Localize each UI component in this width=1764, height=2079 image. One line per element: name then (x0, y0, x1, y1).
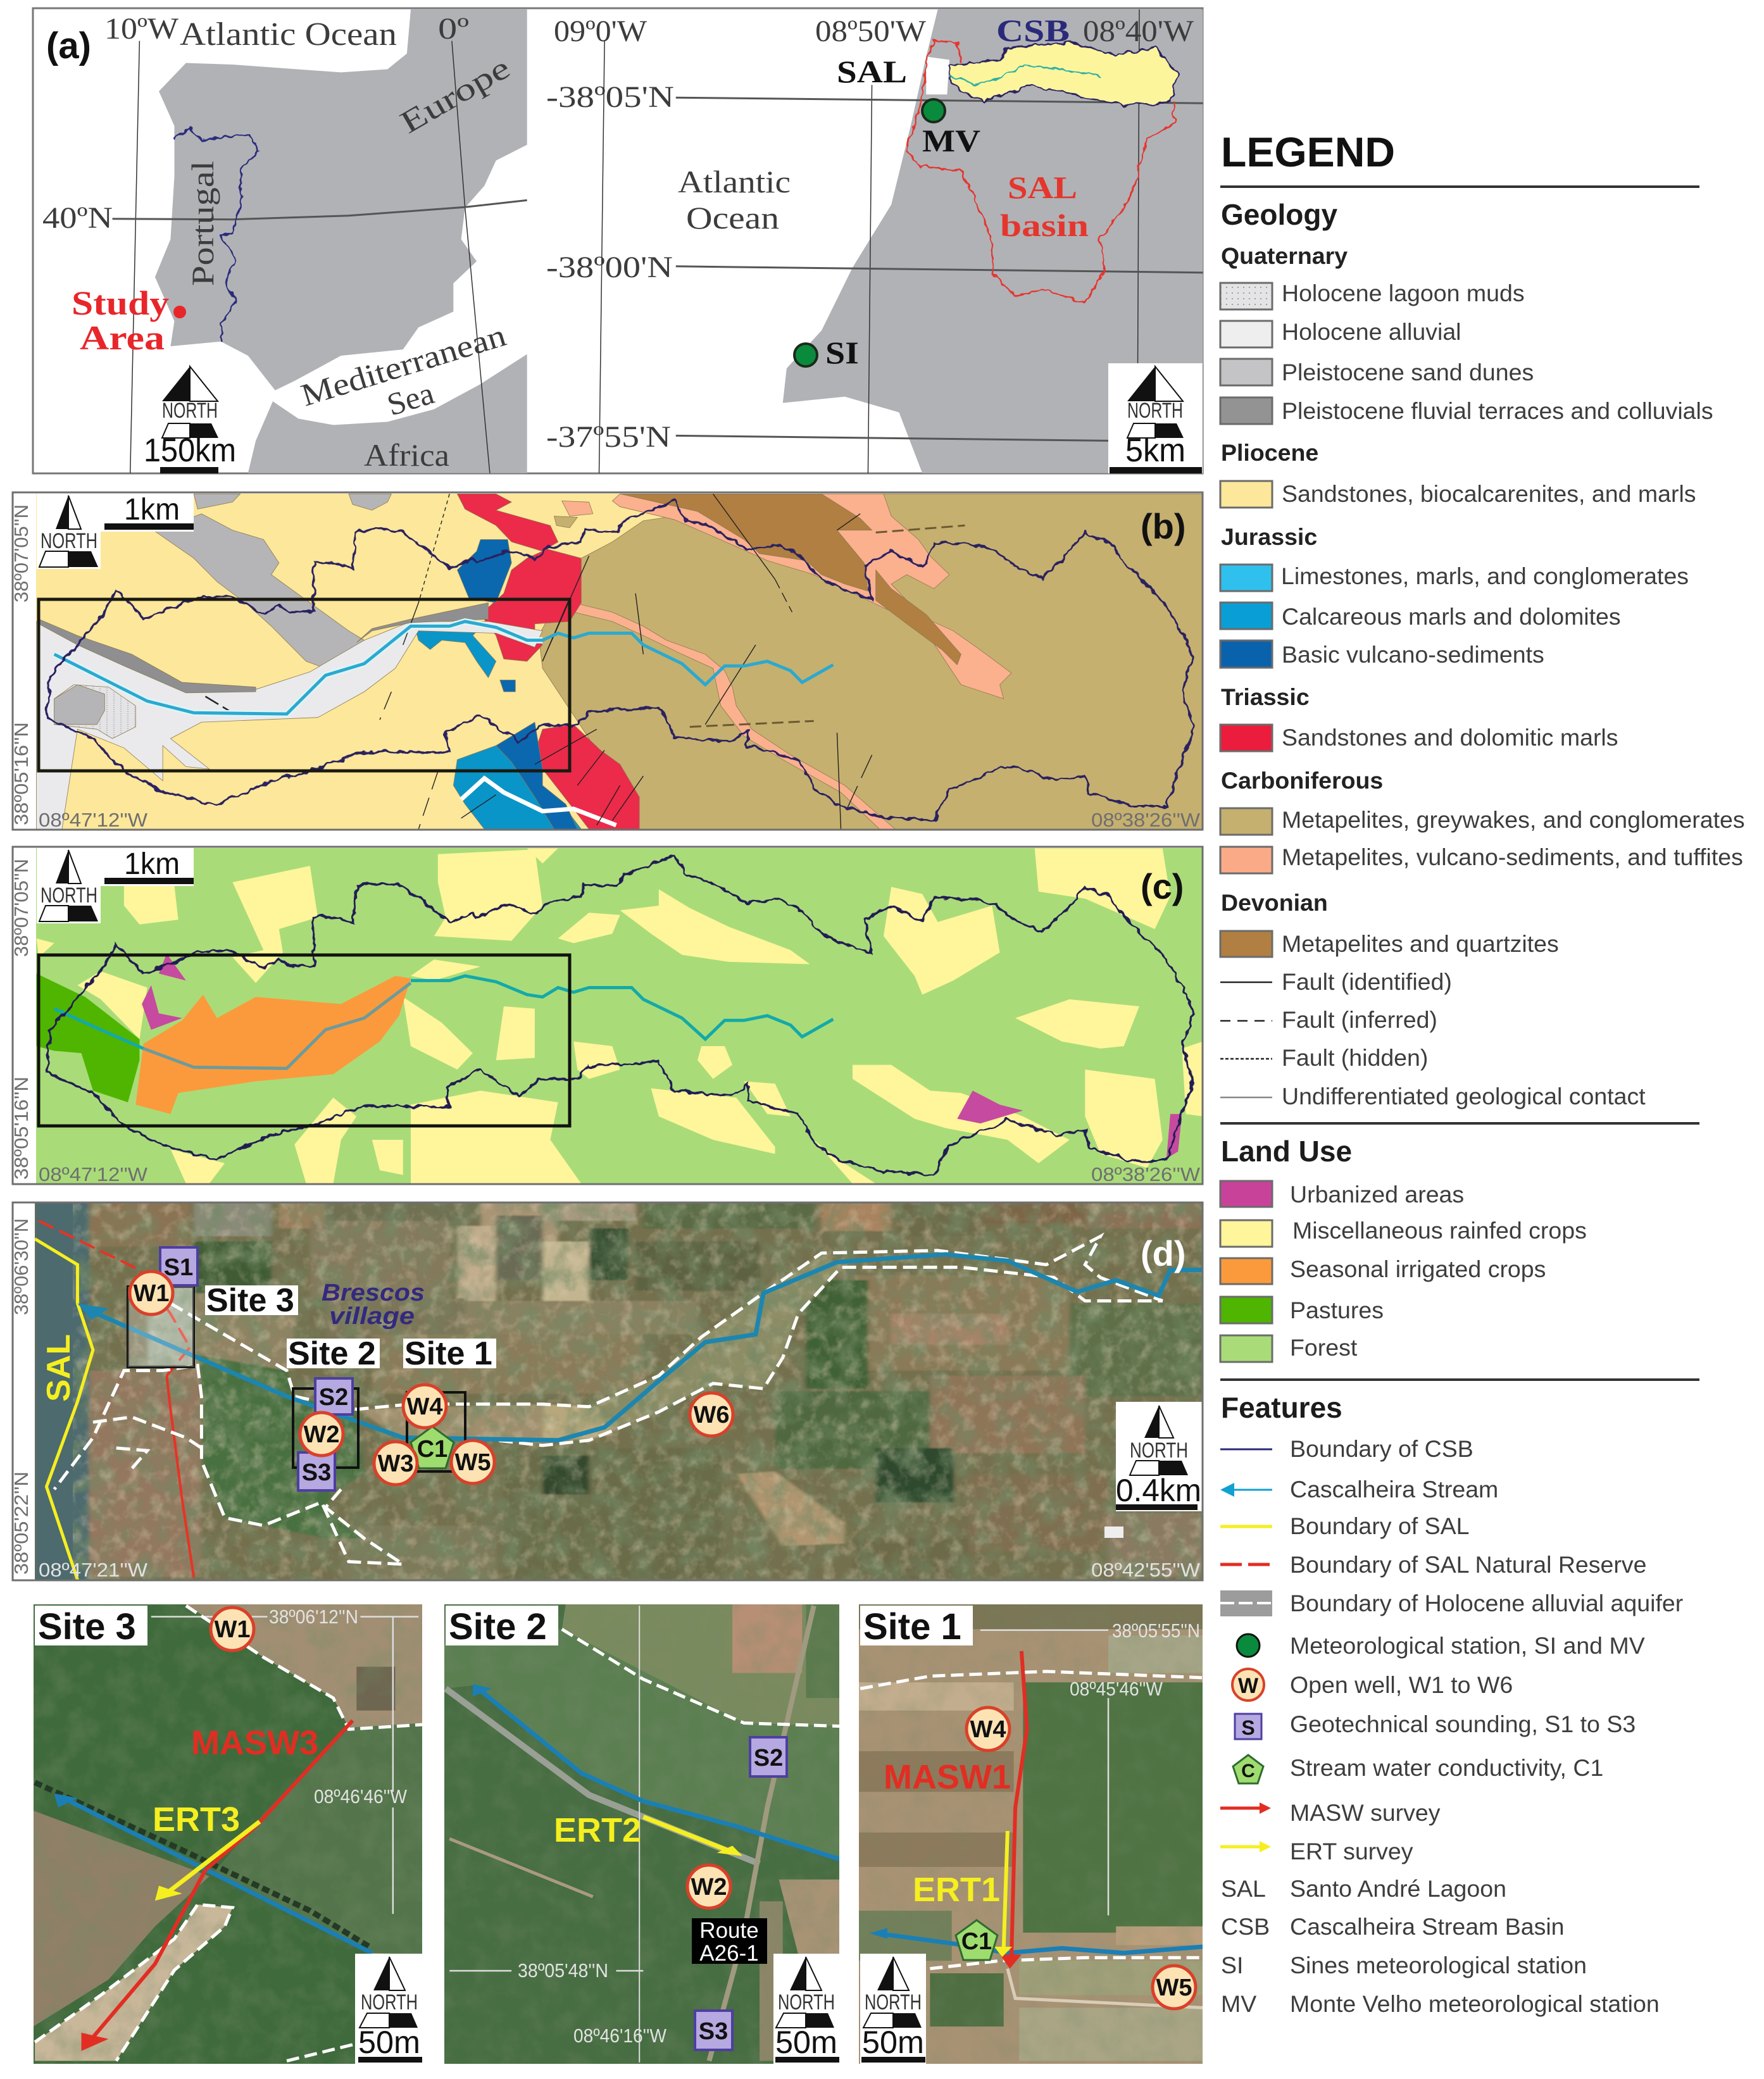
boundary of CSB (46, 855, 1194, 1175)
labels: map (a): Sea (383, 375, 438, 423)
panel: Site 2 (444, 1604, 839, 2064)
section: Geology: Undifferentiated geological contact (1282, 1083, 1646, 1109)
section: Geology (1220, 198, 1745, 1109)
section: Geology: Geology (1221, 198, 1337, 231)
north arrow and scale: map (c): NORTH (41, 883, 97, 908)
stream conductivity C1: C1 (417, 1436, 447, 1463)
icon: meteorological station SI (794, 344, 817, 366)
north arrow: map (a) right (1108, 363, 1203, 473)
section: Geology: Triassic (1221, 684, 1310, 710)
labels: Site 1: Site 1 (863, 1606, 961, 1647)
north arrow and scale: map (d): NORTH (1130, 1439, 1188, 1463)
labels: map (a): 08º40'W (1083, 15, 1194, 48)
label: SAL: SAL (41, 1334, 77, 1402)
labels: map (a): Portugal (185, 161, 220, 286)
labels: Site 1: C1 (961, 1928, 992, 1955)
section: Land Use: Pastures (1290, 1297, 1384, 1323)
north arrow and scale: Site 2: NORTH (778, 1990, 835, 2014)
labels: map (a): 40ºN (42, 201, 113, 235)
label: Brescos village: Brescos (322, 1280, 425, 1306)
labels: Site 1: W5 (1156, 1975, 1192, 2001)
north arrow and scale: map (b) (37, 493, 194, 569)
section: Geology: Sandstones and dolomitic marls (1282, 724, 1618, 751)
labels: map (a): Mediterranean (297, 317, 510, 413)
north arrow and scale: Site 1 (860, 1954, 926, 2064)
site labels: Site 3 (206, 1282, 294, 1319)
panel: (a) location maps (33, 8, 1203, 473)
north arrow and scale: map (c) (37, 847, 194, 923)
linework: alluvial aquifer boundary, lagoon, reserve, stream (35, 1221, 1203, 1580)
study window rectangle (39, 599, 570, 771)
labels: map (a): Europe (394, 49, 516, 140)
coordinates: map (d): 38º05'22''N (10, 1471, 32, 1575)
section: Features: Boundary of Holocene alluvial aquifer (1290, 1590, 1683, 1616)
site labels (205, 1282, 496, 1372)
section: Geology: Metapelites, vulcano-sediments, and tuffites (1282, 844, 1743, 870)
north arrow and scale: map (b): 1km (124, 493, 180, 527)
section: Features: Open well, W1 to W6 (1290, 1671, 1513, 1698)
imagery: Site 1 (859, 1604, 1203, 2064)
coordinates: map (d): 08º42'55''W (1091, 1559, 1201, 1581)
Portugal border, CSB and SAL basin outlines (175, 39, 1178, 342)
labels: Site 2 (446, 1606, 787, 2050)
labels: map (a): 0º (438, 12, 469, 46)
section: Land Use: Seasonal irrigated crops (1290, 1256, 1546, 1282)
land: Iberia and Africa (113, 9, 1203, 473)
section: Features: MASW survey (1290, 1799, 1441, 1826)
section: Land Use: Urbanized areas (1290, 1181, 1464, 1208)
section: Geology: Basic vulcano-sediments (1282, 641, 1544, 668)
section: Features: Features (1221, 1391, 1342, 1424)
coordinates: map (c): 38º07'05''N (10, 859, 32, 957)
section: Land Use: Land Use (1221, 1135, 1352, 1168)
label: Route A26-1: A26-1 (699, 1941, 759, 1966)
section: Geology: Fault (inferred) (1282, 1006, 1437, 1033)
north arrow and scale: Site 1: NORTH (865, 1990, 922, 2014)
land-use polygons (37, 848, 1203, 1183)
section: Geology: Metapelites and quartzites (1282, 930, 1559, 957)
section: Geology: Carboniferous (1221, 767, 1383, 794)
section: Geology: Holocene alluvial (1282, 318, 1461, 345)
labels: map (a): basin (1000, 208, 1089, 243)
wells W1 to W6: W1 (133, 1280, 170, 1307)
label: Route A26-1: Route (699, 1918, 759, 1943)
labels: map (a): (a) (46, 25, 91, 66)
stream conductivity C1 (411, 1427, 454, 1468)
linework: Site 3 (35, 1606, 422, 2061)
stream: Cascalheira (54, 976, 833, 1068)
linework: Site 2 (446, 1606, 839, 2063)
labels: Site 1 (860, 1606, 1200, 2009)
labels: Site 2: W2 (691, 1874, 727, 1901)
labels: Site 3: MASW3 (191, 1724, 318, 1762)
labels: map (a): MV (922, 123, 980, 158)
north arrow and scale: map (b): NORTH (41, 529, 97, 553)
labels: Site 2: Site 2 (449, 1606, 547, 1647)
labels: Site 1: W4 (970, 1716, 1006, 1743)
wells W1 to W6: W5 (454, 1449, 491, 1476)
north arrow: map (a) right: NORTH (1127, 399, 1183, 423)
labels: map (a): Africa (364, 437, 449, 473)
north arrow and scale: Site 2 (773, 1954, 839, 2064)
site labels: Site 1 (404, 1335, 492, 1372)
labels: map (a): -38º00'N (546, 251, 673, 284)
wells W1 to W6: W4 (406, 1394, 443, 1420)
labels: Site 1: 38º05'55''N (1112, 1620, 1200, 1642)
section: Features: SI (1221, 1952, 1243, 1978)
label: Brescos village: village (329, 1303, 415, 1330)
geology polygons (37, 494, 1203, 829)
labels: map (a): Atlantic Ocean (180, 16, 397, 53)
section: Features: Sines meteorological station (1290, 1952, 1587, 1978)
north arrow and scale: Site 3 (355, 1954, 422, 2064)
section: Geology: Holocene lagoon muds (1282, 280, 1525, 306)
labels: Site 2: S2 (754, 1745, 783, 1771)
section: Features: Meteorological station, SI and MV (1290, 1632, 1645, 1659)
satellite imagery background (35, 1202, 1203, 1582)
linework: Site 1 (860, 1630, 1203, 2007)
labels: map (a): 08º50'W (815, 15, 927, 48)
wells W1 to W6: W6 (694, 1402, 729, 1428)
labels: Site 1: 08º45'46''W (1070, 1678, 1163, 1700)
section: Geology: Pleistocene fluvial terraces and colluvials (1282, 397, 1713, 424)
north arrow: map (a) left (144, 366, 236, 473)
soundings S1 to S3 (160, 1247, 353, 1490)
section: Features: Santo André Lagoon (1290, 1875, 1506, 1902)
labels: map (a): Area (80, 319, 165, 357)
north arrow: map (a) right: 5km (1125, 432, 1185, 469)
coordinates: map (b): 08º38'26''W (1091, 809, 1201, 831)
labels: map (a): SAL (837, 54, 907, 89)
heading: LEGEND: LEGEND (1221, 128, 1395, 175)
section: Features: Boundary of SAL (1290, 1513, 1470, 1539)
soundings S1 to S3: S3 (302, 1459, 331, 1486)
section: Land Use: Miscellaneous rainfed crops (1292, 1217, 1587, 1244)
labels: map (a): Atlantic (678, 164, 791, 199)
labels: Site 3: ERT3 (153, 1801, 240, 1839)
imagery: Site 2 (444, 1604, 839, 2064)
north arrow: map (a) left: NORTH (162, 399, 218, 423)
labels: map (a): Ocean (686, 200, 779, 235)
labels: Site 3: 08º46'46''W (314, 1785, 408, 1807)
section: Features: CSB (1221, 1913, 1270, 1940)
section: Features: MV (1221, 1990, 1256, 2017)
section: Features: ERT survey (1290, 1838, 1413, 1864)
imagery: Site 3 (34, 1604, 422, 2064)
section: Geology: Quaternary (1221, 242, 1348, 269)
labels: map (a) (42, 12, 1194, 473)
labels: Site 2: ERT2 (554, 1811, 641, 1849)
panel: Site 3 (34, 1604, 422, 2064)
wells W1 to W6: W3 (377, 1451, 414, 1477)
section: Geology: Calcareous marls and dolomites (1282, 603, 1621, 630)
section: Geology: Metapelites, greywakes, and conglomerates (1282, 806, 1745, 833)
section: Features: Boundary of CSB (1290, 1435, 1473, 1462)
section: Geology: Pliocene (1221, 439, 1318, 466)
study window rectangle (39, 955, 570, 1126)
section: Geology: Sandstones, biocalcarenites, and marls (1282, 480, 1696, 507)
labels: map (a): SAL (1008, 170, 1077, 205)
labels: map (a): Study (72, 284, 169, 322)
labels: Site 3: 38º06'12''N (269, 1606, 358, 1628)
labels: Site 2: 38º05'48''N (518, 1959, 608, 1982)
coordinates: map (b) (10, 504, 1201, 831)
boundary of CSB (46, 501, 1194, 820)
wells W1 to W6: W2 (304, 1421, 339, 1448)
north arrow and scale: Site 2: 50m (775, 2025, 837, 2060)
section: Geology: Limestones, marls, and conglomerates (1281, 563, 1689, 589)
north arrow and scale: map (d) (1116, 1402, 1203, 1511)
section: Features: Stream water conductivity, C1 (1290, 1754, 1603, 1781)
coordinates: map (b): 38º07'05''N (10, 504, 32, 602)
coordinates: map (b): 38º05'16''N (10, 722, 32, 825)
coordinates: map (c): 08º47'12''W (39, 1163, 148, 1185)
label: Route A26-1 (692, 1918, 767, 1966)
heading: (d): (d) (1141, 1233, 1186, 1273)
north arrow and scale: Site 3: NORTH (361, 1990, 418, 2014)
labels: map (a): CSB (996, 13, 1070, 48)
section: Land Use: Forest (1290, 1334, 1358, 1361)
coordinates: map (d): 08º47'21''W (39, 1559, 148, 1581)
section: Geology: Fault (identified) (1282, 968, 1452, 995)
labels: map (a): -38º05'N (546, 80, 674, 114)
north arrow and scale: map (d): 0.4km (1116, 1473, 1201, 1508)
panel: (c) land use map (10, 847, 1203, 1185)
section: Features (1220, 1391, 1683, 2017)
section: Geology: Devonian (1221, 889, 1328, 916)
north arrow: map (a) left: 150km (144, 432, 236, 469)
coordinates: map (c) (10, 859, 1201, 1185)
labels: Site 1: MASW1 (884, 1758, 1011, 1796)
heading: (b): (b) (1141, 506, 1186, 546)
labels: map (a): 09º0'W (554, 15, 647, 48)
panel: legend (1220, 128, 1745, 2017)
section: Geology: Fault (hidden) (1282, 1044, 1428, 1071)
section: Land Use (1220, 1135, 1587, 1362)
labels: Site 3: Site 3 (38, 1606, 136, 1647)
site labels: Site 2 (288, 1335, 376, 1372)
coordinates: map (d) (10, 1218, 1201, 1581)
coordinates: map (d): 38º06'30''N (10, 1218, 32, 1315)
labels: map (a): -37º55'N (546, 420, 671, 454)
section: Geology: Pleistocene sand dunes (1282, 359, 1534, 385)
section: Features: Geotechnical sounding, S1 to S3 (1290, 1711, 1636, 1737)
labels: map (a): 10ºW (104, 12, 179, 46)
section: Features: SAL (1221, 1875, 1266, 1902)
label: Brescos village (322, 1280, 425, 1330)
coordinates: map (c): 38º05'16''N (10, 1077, 32, 1180)
section: Features: S (1241, 1716, 1255, 1739)
north arrow and scale: Site 1: 50m (862, 2025, 924, 2060)
coordinates: map (b): 08º47'12''W (39, 809, 148, 831)
labels: Site 2: S3 (699, 2018, 728, 2045)
section: Features: Cascalheira Stream (1290, 1476, 1498, 1502)
faults (205, 494, 965, 829)
section: Geology: Jurassic (1221, 523, 1317, 550)
north arrow and scale: map (c): 1km (124, 847, 180, 881)
labels: map (a): SI (825, 335, 859, 370)
panel: (d) satellite map (10, 1202, 1203, 1582)
north arrow and scale: Site 3: 50m (358, 2025, 420, 2060)
panel: (b) geology map (10, 492, 1203, 831)
soundings S1 to S3: S1 (164, 1254, 193, 1281)
wells W1 to W6 (130, 1271, 733, 1485)
icon: meteorological station MV (922, 99, 945, 122)
heading: (c): (c) (1141, 866, 1184, 906)
site rectangles (128, 1287, 465, 1471)
coordinates: map (c): 08º38'26''W (1091, 1163, 1201, 1185)
section: Features: Boundary of SAL Natural Reserve (1290, 1551, 1647, 1578)
soundings S1 to S3: S2 (319, 1384, 348, 1411)
labels: Site 3: W1 (214, 1616, 251, 1643)
labels: Site 3 (35, 1606, 408, 1839)
labels: Site 1: ERT1 (913, 1871, 1000, 1909)
section: Features: C (1241, 1761, 1255, 1782)
section: Features: Cascalheira Stream Basin (1290, 1913, 1565, 1940)
section: Features: W (1238, 1674, 1259, 1698)
labels: Site 2: 08º46'16''W (573, 2025, 667, 2047)
panel: Site 1 (859, 1604, 1203, 2064)
section: Features: Monte Velho meteorological station (1290, 1990, 1660, 2017)
stream: Cascalheira (54, 621, 833, 714)
